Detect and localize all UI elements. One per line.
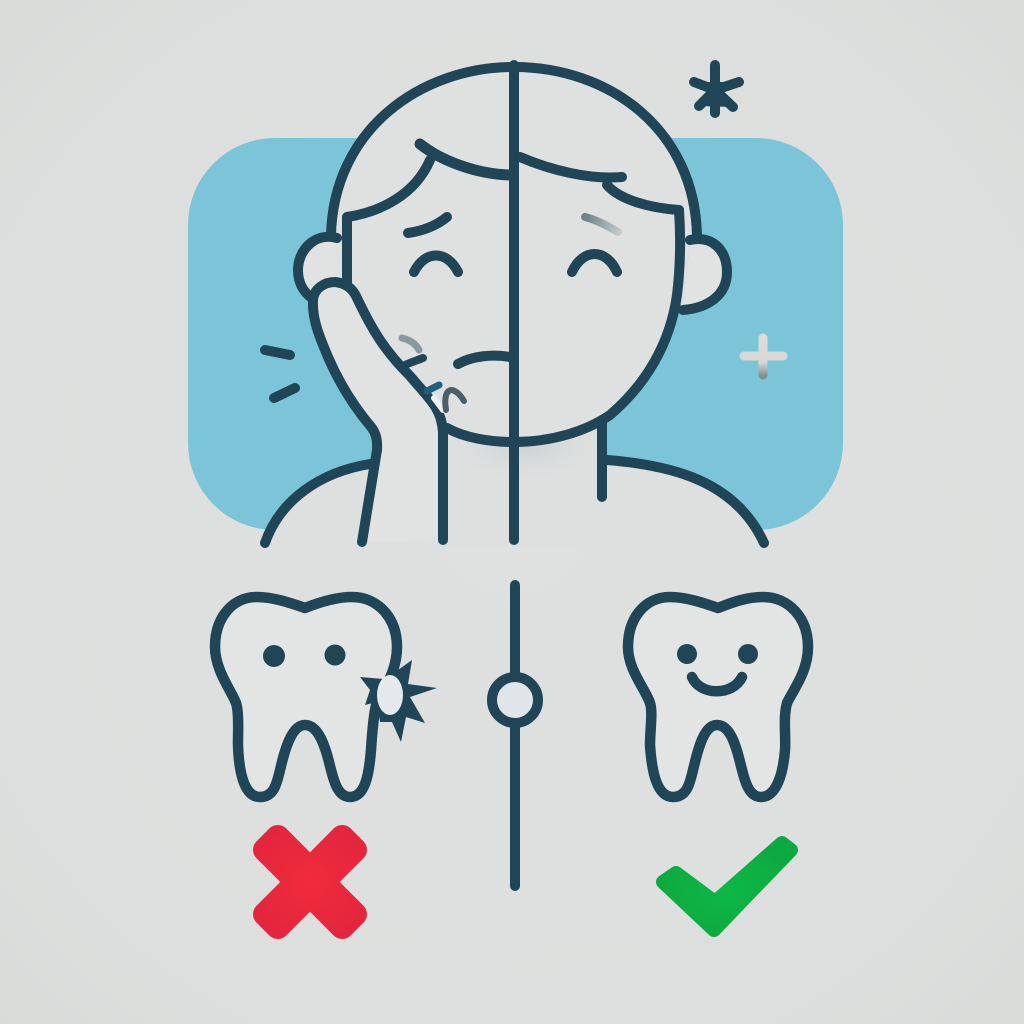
- curl crease: [445, 390, 464, 410]
- head fill: [331, 67, 697, 442]
- burst highlight: [377, 675, 403, 715]
- neck right: [597, 420, 607, 497]
- hair fringe left: [420, 144, 510, 175]
- sparkle: asterisk: [694, 65, 739, 113]
- hair right: [607, 185, 679, 210]
- sad tooth icon: [215, 597, 437, 797]
- left ear: [298, 237, 345, 298]
- white highlight: [434, 398, 443, 410]
- left ear outline: [298, 237, 337, 298]
- plus horizontal bar: [744, 352, 783, 360]
- happy tooth icon: [628, 597, 808, 797]
- dark crease: [405, 358, 423, 365]
- hair fringe right: [520, 157, 622, 178]
- smile: [692, 677, 742, 691]
- right eye: [572, 254, 617, 272]
- left eye: [414, 256, 458, 272]
- grey crease: [402, 338, 419, 350]
- face outline right and chin: [447, 210, 680, 442]
- sparkle: plus: [744, 338, 783, 375]
- right brow: [585, 217, 618, 232]
- motion marks: [265, 350, 295, 398]
- chin shadow: [447, 432, 602, 502]
- pain burst: [360, 660, 437, 742]
- pain marks on cheek: [402, 338, 464, 410]
- center divider: [509, 65, 519, 540]
- left brow: [408, 217, 447, 233]
- teal backdrop: [188, 138, 843, 530]
- green check icon: [663, 843, 791, 930]
- red cross icon: [265, 837, 355, 927]
- person illustration: [262, 65, 768, 546]
- mouth: [458, 356, 510, 364]
- hair left: [347, 160, 430, 288]
- asterisk hub: [709, 84, 721, 96]
- right ear: [683, 239, 727, 310]
- head outline: [331, 67, 697, 236]
- blue crease: [427, 385, 439, 391]
- hand on cheek: [313, 282, 443, 542]
- right ear outline: [683, 239, 727, 310]
- tooth eyes: [677, 644, 758, 664]
- left shoulder: [265, 464, 370, 543]
- right shoulder: [607, 460, 764, 543]
- body fill: [262, 425, 768, 546]
- tooth eyes: [263, 644, 346, 667]
- lower divider with circle: [492, 585, 538, 886]
- plus vertical bar: [758, 338, 768, 375]
